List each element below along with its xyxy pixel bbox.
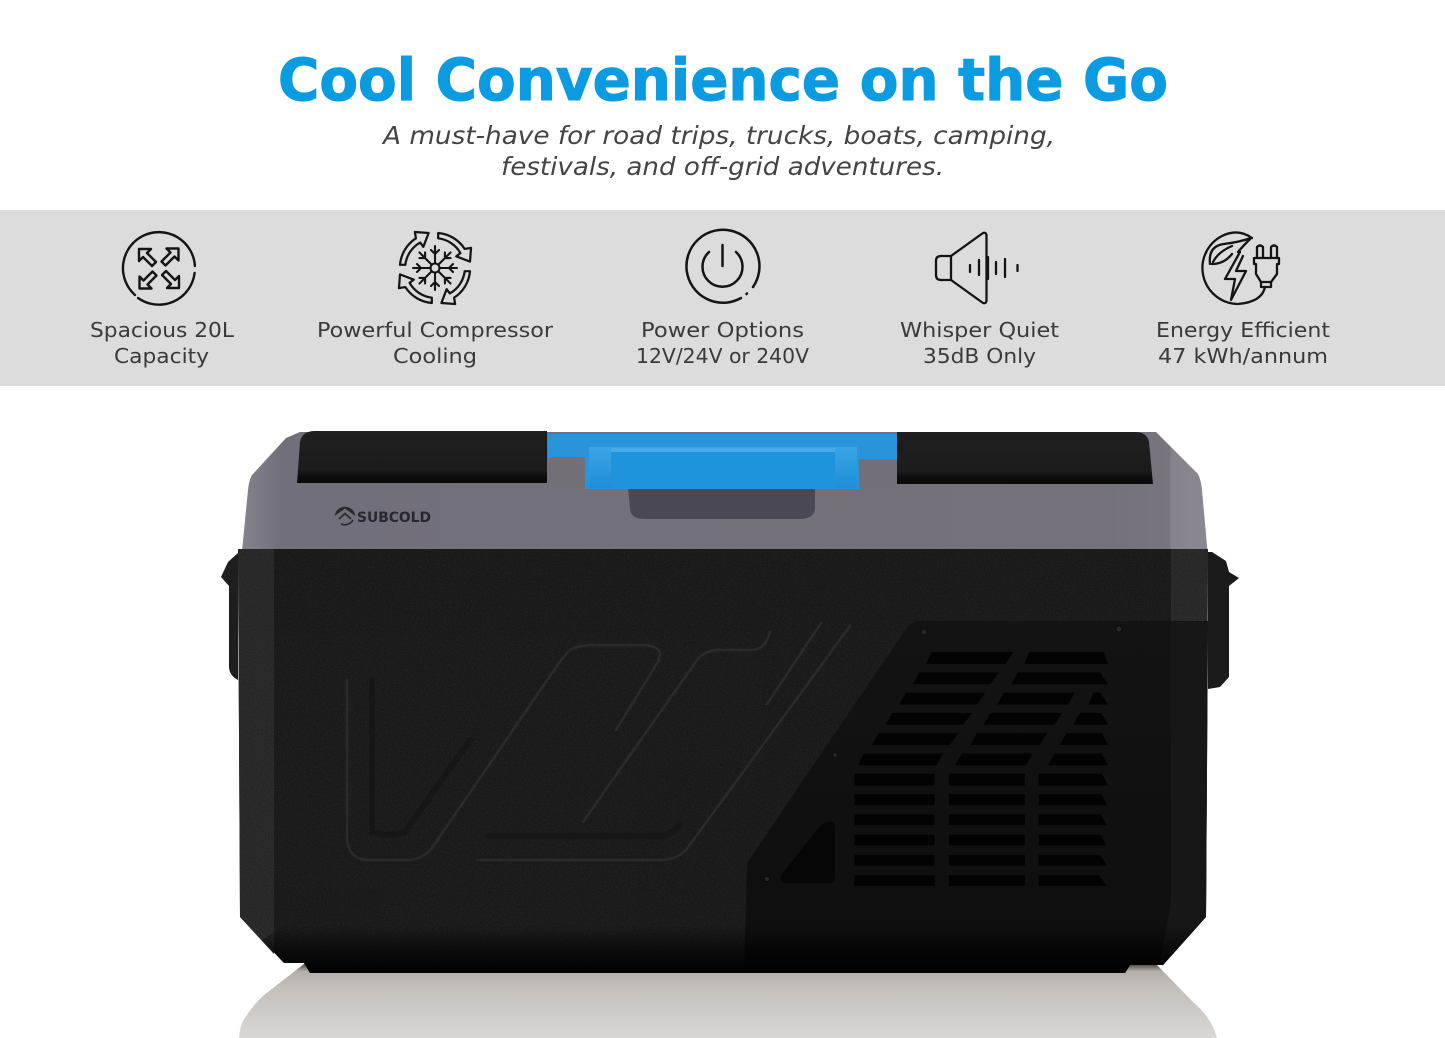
- label: energy efficient: [1156, 318, 1330, 368]
- label: cooling: Cooling: [393, 344, 477, 368]
- label: energy efficient: Energy Efficient: [1156, 318, 1330, 342]
- label: cooling: [317, 318, 554, 368]
- icon: energy efficient: [1202, 232, 1279, 304]
- subtitle: [381, 121, 1055, 181]
- icon: speaker: [936, 233, 1018, 303]
- vent panel: [744, 621, 1208, 973]
- panel cutout: [781, 822, 835, 883]
- cooler body: [238, 549, 1208, 973]
- cooler: [221, 431, 1239, 973]
- body side bands: [238, 549, 1209, 969]
- panel right band: [1160, 622, 1208, 965]
- logo: subcold: SUBCOLD: [357, 510, 431, 526]
- lid: [242, 432, 1208, 551]
- logo: subcold: [336, 508, 431, 526]
- panel: feature band: [0, 210, 1445, 386]
- side handle left: [221, 553, 238, 680]
- icon: capacity arrows: [123, 232, 195, 305]
- lid recess: [628, 488, 815, 519]
- icon: compressor snowflake: [399, 232, 471, 304]
- title: Cool Convenience on the Go: [278, 46, 1168, 114]
- body bottom shading: [262, 925, 1199, 973]
- label: capacity: [90, 318, 235, 368]
- embossed v pattern: [347, 623, 850, 860]
- label: capacity: Spacious 20L: [90, 318, 235, 342]
- label: whisper quiet: 35dB Only: [923, 344, 1036, 368]
- label: cooling: Powerful Compressor: [317, 318, 554, 342]
- icon: power button: [686, 230, 759, 303]
- blue handle: [589, 447, 857, 488]
- label: power options: Power Options: [641, 318, 804, 342]
- vents: [855, 652, 1108, 886]
- right lid pad: [897, 432, 1153, 484]
- label: whisper quiet: [900, 318, 1059, 368]
- floor reflection: [239, 964, 1217, 1038]
- label: whisper quiet: Whisper Quiet: [900, 318, 1059, 342]
- blue handle hinge: [548, 434, 897, 489]
- label: power options: 12V/24V or 240V: [636, 344, 809, 368]
- subtitle: A must-have for road trips, trucks, boats, camping,: [381, 121, 1055, 150]
- side handle right: [1208, 552, 1239, 689]
- subtitle: festivals, and off-grid adventures.: [501, 152, 944, 181]
- label: power options: [636, 318, 809, 368]
- panel screws: [764, 626, 1122, 882]
- body grain texture: [238, 549, 1208, 969]
- lid shoulders: [547, 457, 585, 490]
- label: capacity: Capacity: [114, 344, 209, 368]
- left lid pad: [297, 431, 547, 483]
- label: energy efficient: 47 kWh/annum: [1158, 344, 1328, 368]
